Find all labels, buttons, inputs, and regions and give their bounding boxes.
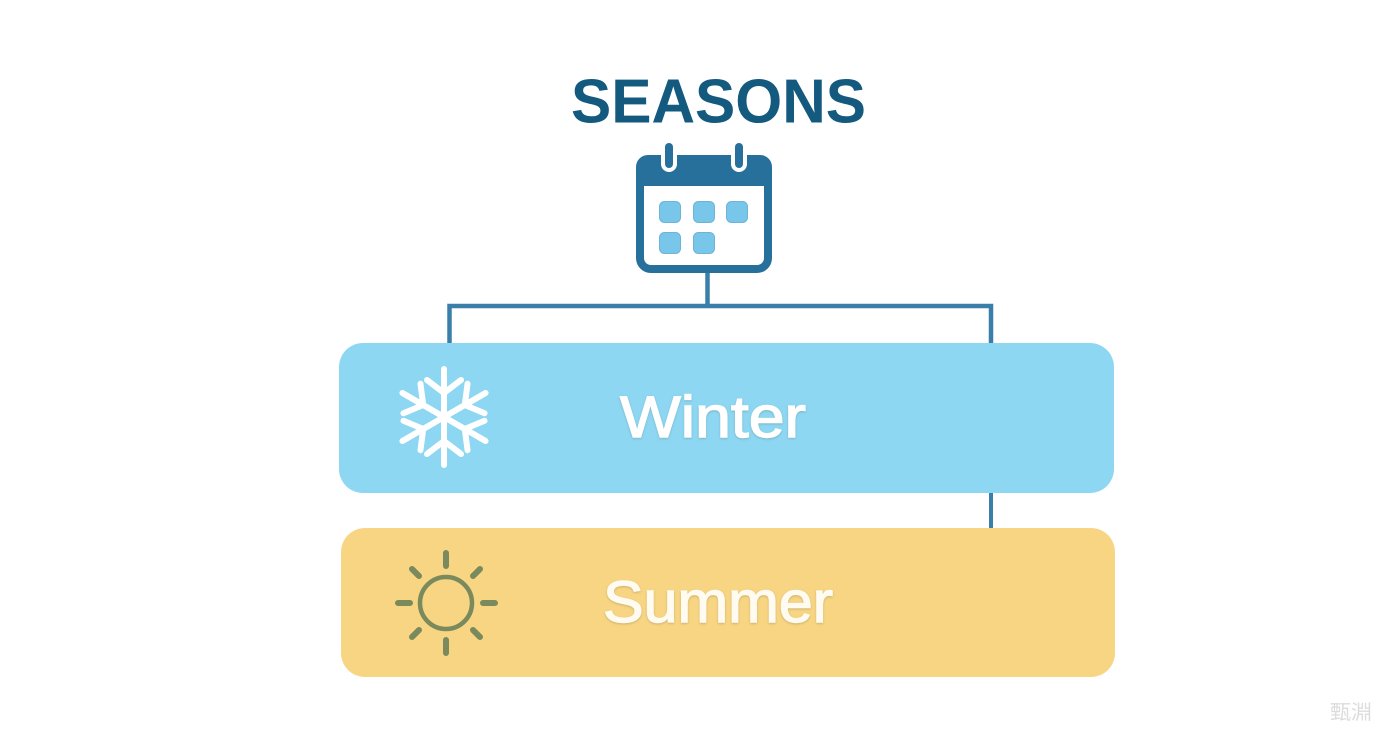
icon: snowflake [394, 369, 494, 465]
connector lines [450, 270, 991, 529]
icon: sun [398, 553, 495, 653]
title: SEASONS [571, 68, 866, 136]
label: winter: Winter [620, 385, 806, 450]
panel: summer [341, 528, 1115, 677]
icon: calendar [636, 143, 772, 269]
panel: winter [339, 343, 1114, 493]
label: summer: Summer [603, 570, 833, 635]
watermark: 甄淵 [1330, 701, 1372, 724]
